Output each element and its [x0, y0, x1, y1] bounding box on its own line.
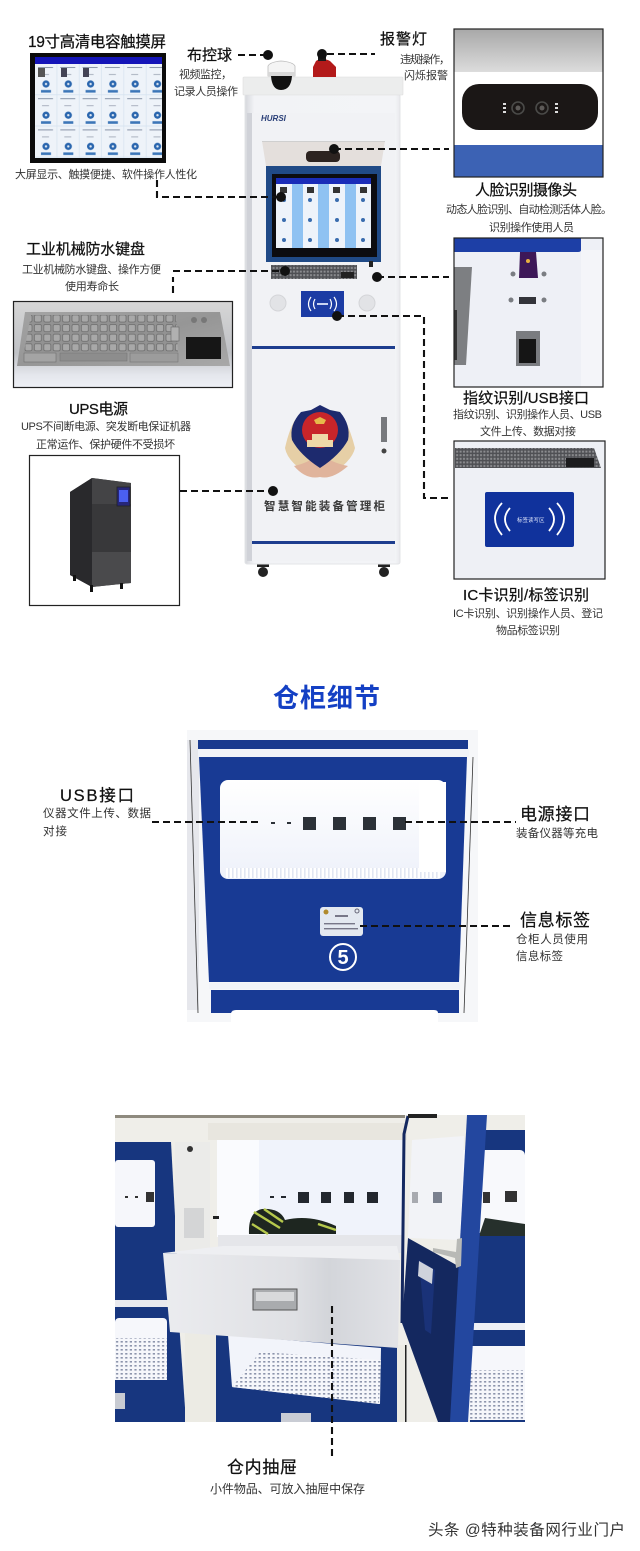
compartment photo	[187, 730, 478, 1022]
open door	[402, 1115, 487, 1422]
logo: HURSI	[261, 114, 287, 123]
lower pillar	[185, 1330, 217, 1422]
section title: 仓柜细节	[273, 683, 380, 713]
dome camera	[268, 61, 295, 90]
cabinet top cap	[243, 77, 403, 95]
text: UPS description	[21, 419, 191, 451]
heading: keyboard: 工业机械防水键盘	[26, 240, 145, 258]
text: info label description	[516, 932, 588, 963]
info label	[320, 907, 363, 936]
heading: fingerprint: 指纹识别/USB接口	[463, 390, 589, 407]
blue trim lines	[252, 346, 395, 544]
police emblem	[285, 405, 355, 478]
text: UPS description: 正常运作、保护硬件不受损坏	[36, 437, 175, 451]
heading: dome camera: 布控球	[187, 47, 232, 64]
text: touch screen description: 大屏显示、触摸便捷、软件操作人性化	[15, 167, 197, 181]
fingerprint panel	[454, 238, 603, 387]
drawer handle	[253, 1289, 297, 1310]
heading: touch screen: 19寸高清电容触摸屏	[28, 33, 166, 51]
text: alarm light description: 违规操作，	[400, 52, 450, 66]
screen recess	[262, 141, 385, 166]
cabinet keyboard	[271, 265, 357, 279]
text: alarm light description: 闪烁报警	[404, 68, 448, 82]
shelf	[218, 1235, 404, 1253]
text: power port description: 装备仪器等充电	[516, 826, 598, 840]
cabinet	[243, 54, 403, 577]
watermark: 头条 @特种装备网行业门户	[428, 1521, 625, 1539]
text: fingerprint description: 指纹识别、识别操作人员、USB	[453, 407, 602, 421]
text: keyboard description: 工业机械防水键盘、操作方便	[22, 262, 161, 276]
text: fingerprint description: 文件上传、数据对接	[480, 424, 576, 438]
compartment number: 5	[337, 947, 349, 969]
text: keyboard description	[22, 262, 161, 293]
nfc reader	[301, 291, 344, 317]
text: alarm light description	[400, 52, 450, 82]
heading: IC card: IC卡识别/标签识别	[463, 587, 589, 604]
drawer callout line	[331, 1306, 333, 1458]
compartment door	[199, 757, 467, 982]
lower compartment	[216, 1335, 397, 1422]
cabinet wheels	[257, 563, 390, 577]
text: usb port description	[43, 806, 152, 838]
drawer	[163, 1246, 400, 1348]
screen	[266, 166, 381, 262]
callout lines	[157, 49, 449, 498]
heading: usb port: USB接口	[60, 786, 134, 805]
text: IC card description	[453, 606, 603, 637]
heading: info label: 信息标签	[520, 911, 590, 930]
text: dome camera description	[174, 67, 238, 98]
text: face camera description: 识别操作使用人员	[489, 220, 574, 234]
text: drawer description: 小件物品、可放入抽屉中保存	[210, 1481, 365, 1496]
text: face camera description	[446, 202, 612, 234]
round buttons	[270, 295, 375, 311]
door hinge	[433, 1238, 462, 1268]
touch screen image	[30, 53, 166, 163]
heading: power port: 电源接口	[520, 805, 590, 824]
open compartment	[217, 1140, 403, 1237]
compartment window	[220, 780, 446, 879]
IC card panel: 标签读写区	[517, 516, 545, 524]
straps	[249, 1209, 336, 1234]
text: usb port description: 对接	[43, 824, 68, 838]
text: dome camera description: 记录人员操作	[174, 84, 238, 98]
heading: UPS: UPS电源	[69, 401, 128, 418]
face camera panel	[454, 29, 603, 177]
IC card panel	[454, 441, 605, 579]
text: info label description: 信息标签	[516, 949, 564, 963]
text: dome camera description: 视频监控，	[179, 67, 232, 81]
heading: drawer: 仓内抽屉	[227, 1458, 297, 1477]
keyboard image	[14, 302, 232, 388]
UPS image	[30, 456, 180, 606]
left neighbouring compartment	[115, 1142, 186, 1422]
cabinet name: 智慧智能装备管理柜	[264, 499, 386, 513]
text: fingerprint description	[453, 407, 602, 438]
upper band	[208, 1123, 407, 1140]
compartment sockets	[270, 1192, 378, 1203]
right neighbouring compartment	[446, 1130, 525, 1422]
heading: alarm light: 报警灯	[380, 31, 427, 48]
text: IC card description: 物品标签识别	[496, 623, 560, 637]
fingerprint and usb	[369, 261, 373, 267]
text: face camera description: 动态人脸识别、自动检测活体人脸。	[446, 202, 612, 216]
centre pillar	[175, 1142, 210, 1253]
compartment callout lines	[152, 822, 516, 926]
compartment number	[330, 944, 356, 970]
cabinet body	[245, 94, 400, 564]
text: UPS description: UPS不间断电源、突发断电保证机器	[21, 419, 191, 433]
text: usb port description: 仪器文件上传、数据	[43, 806, 152, 820]
text: IC card description: IC卡识别、识别操作人员、登记	[453, 606, 603, 620]
power sockets	[271, 817, 406, 830]
face camera	[306, 151, 340, 162]
heading: face camera: 人脸识别摄像头	[475, 182, 577, 199]
alarm light	[313, 54, 336, 77]
drawer photo	[115, 1115, 525, 1422]
text: keyboard description: 使用寿命长	[65, 279, 119, 293]
door lock	[381, 417, 387, 454]
door frame	[450, 1115, 487, 1422]
text: info label description: 仓柜人员使用	[516, 932, 588, 946]
